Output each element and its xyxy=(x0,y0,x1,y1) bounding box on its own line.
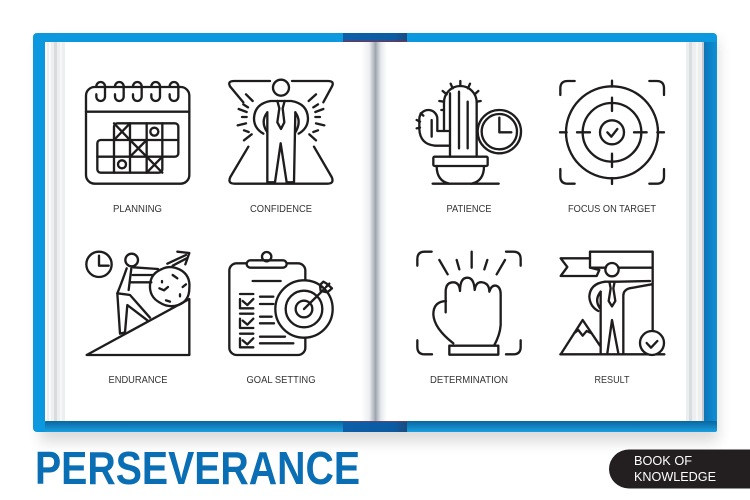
icon: crosshair target xyxy=(560,81,664,184)
panel: endurance xyxy=(86,252,189,386)
title: PERSEVERANCE xyxy=(35,442,360,494)
spine top xyxy=(343,33,407,42)
panel: determination xyxy=(417,252,521,386)
panel: goal setting xyxy=(229,252,333,386)
icon: cactus and clock xyxy=(417,81,521,184)
badge: book of knowledge: BOOK OF xyxy=(634,453,692,468)
icon: calendar xyxy=(86,82,189,184)
panel: result xyxy=(560,252,664,386)
panel: confidence xyxy=(229,80,333,215)
label: confidence: CONFIDENCE xyxy=(250,204,312,215)
icon: pushing boulder uphill xyxy=(86,252,189,355)
panel: focus on target xyxy=(560,81,664,215)
label: patience: PATIENCE xyxy=(446,204,492,215)
label: determination: DETERMINATION xyxy=(430,375,508,386)
icon: raised fist xyxy=(417,252,521,355)
book cover xyxy=(33,33,717,432)
badge: book of knowledge xyxy=(609,450,750,488)
badge: book of knowledge: KNOWLEDGE xyxy=(634,469,716,484)
panel: planning xyxy=(86,82,189,215)
label: focus on target: FOCUS ON TARGET xyxy=(568,204,656,215)
label: endurance: ENDURANCE xyxy=(108,375,168,386)
label: goal setting: GOAL SETTING xyxy=(246,375,316,386)
book xyxy=(33,33,718,442)
icon: person with flag and mountain xyxy=(560,252,664,355)
right page xyxy=(376,42,704,421)
spine bottom xyxy=(343,421,407,432)
left page xyxy=(45,42,376,421)
icon: clipboard and target xyxy=(229,252,333,355)
label: planning: PLANNING xyxy=(113,204,162,215)
icon: confident person xyxy=(229,80,333,184)
panel: patience xyxy=(417,81,521,215)
label: result: RESULT xyxy=(594,375,630,386)
